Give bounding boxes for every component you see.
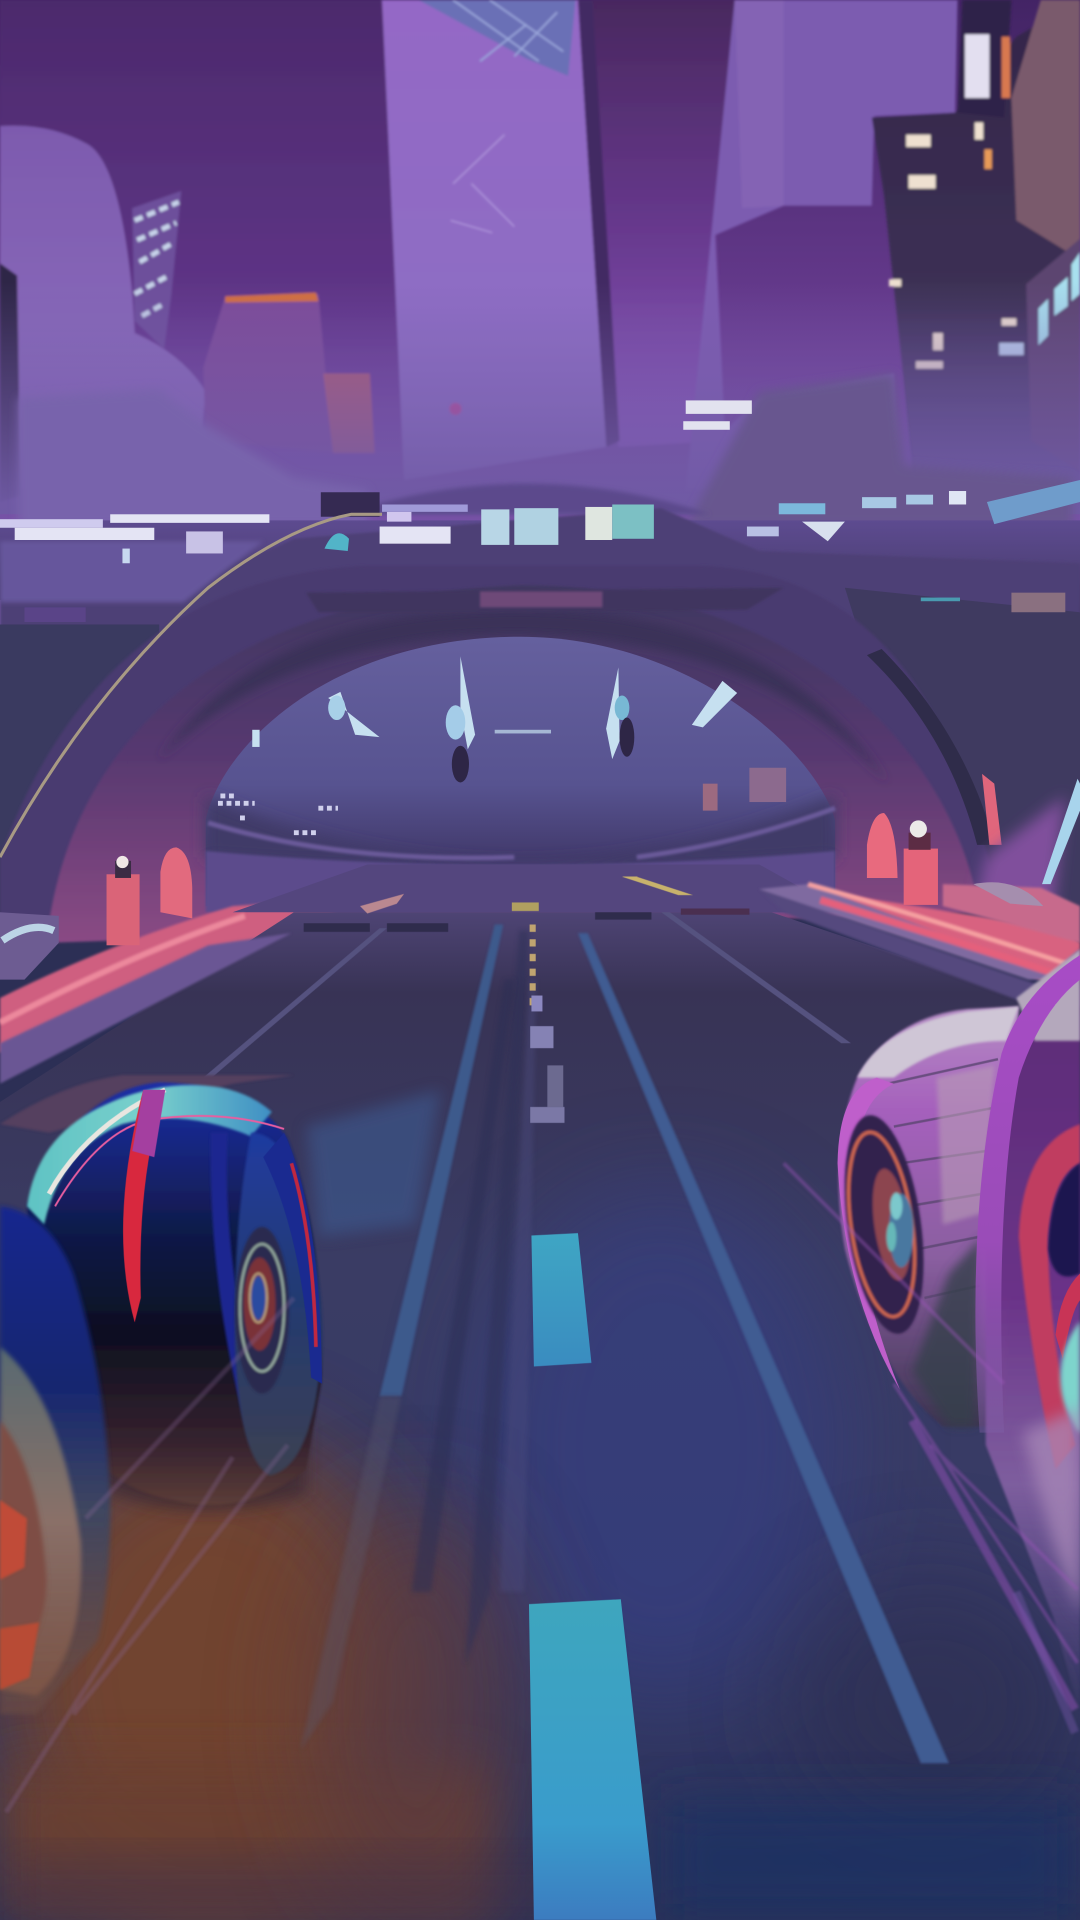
road bridge arch: [0, 514, 1080, 943]
right sidewalk pink: [765, 882, 1080, 980]
left car wheels: [0, 1075, 322, 1812]
building: far right brown slab: [1011, 0, 1080, 260]
left sidewalk pink: [0, 896, 367, 1053]
blue tyre groove: [210, 1133, 272, 1445]
right main lane: [578, 933, 949, 1763]
pale wash over big wheel: [1022, 1408, 1080, 1616]
building: dark right tower: [576, 0, 747, 447]
building: lit facade signage: [132, 191, 181, 349]
middle cyan dash: [531, 1233, 591, 1367]
lantern left tall: [107, 874, 140, 945]
bottom right blue: [661, 1800, 1080, 1920]
road colour washes: [0, 1090, 1080, 1920]
tyre tread ridges: [888, 1059, 998, 1298]
right teal structure panels: [921, 598, 960, 601]
hanging lights: [252, 656, 737, 759]
building: central tower side edge: [578, 0, 620, 447]
cyan sign: [324, 533, 349, 551]
road lane markings: [203, 877, 949, 1920]
road underlay upper segment: [233, 864, 845, 912]
building: tower glass roof: [419, 0, 576, 76]
building: pale right stack: [686, 0, 958, 490]
brown dust centre: [306, 1504, 527, 1920]
neon strips right: [683, 400, 1080, 541]
low haze over the city: [0, 282, 1080, 514]
building: pink beacon: [449, 403, 462, 415]
big tyre tread: [1016, 949, 1080, 1041]
tyre white sheen: [49, 1090, 165, 1194]
right side pink strip: [982, 774, 1002, 845]
building: top right dark block: [958, 0, 1011, 118]
building: lower right tower: [1026, 239, 1080, 471]
treads behind left tyre: [0, 1075, 294, 1133]
left front tyre body: [27, 1082, 321, 1505]
pink panels on bridge: [480, 591, 602, 607]
brown dust bottom-left band: [0, 1763, 490, 1920]
magenta sidewall: [838, 1078, 900, 1390]
main road surface: [0, 912, 1080, 1920]
arch inner ring: [47, 585, 980, 943]
big rim red ring: [1019, 1124, 1080, 1469]
centre tracks: [465, 931, 529, 1665]
rear left tyre body: [0, 1206, 110, 1714]
lantern left cap: [115, 856, 131, 878]
building: main central tower: [382, 0, 606, 480]
low grey-purple buildings: [18, 389, 367, 527]
city skyline buildings: [0, 0, 1080, 502]
building: cyan window strip: [1038, 299, 1048, 345]
dark asphalt right: [784, 1567, 1078, 1837]
lantern right cap: [909, 820, 931, 850]
arch doorway right: [867, 813, 898, 878]
big magenta arc: [975, 955, 1080, 1433]
big rim interior: [1048, 1163, 1080, 1277]
wheel rim: [235, 1227, 289, 1393]
far cross bars: [304, 909, 749, 932]
building: faint window grid: [451, 135, 514, 233]
lantern right tall: [904, 849, 938, 905]
right low wall: [943, 884, 1080, 943]
tunnel wall signs: [749, 768, 786, 802]
building: orange roof highlight: [225, 293, 318, 302]
pink lanterns and pillars: [0, 813, 1080, 1053]
shadow under left tyre: [37, 1371, 306, 1510]
building: pale left block: [0, 126, 294, 490]
main arch outer ring: [0, 566, 998, 943]
tunnel opening: [206, 637, 835, 912]
arch doorway left: [160, 847, 192, 918]
brown dust left: [0, 1430, 416, 1920]
speed lines: [6, 1298, 294, 1812]
tunnel left lights: [218, 796, 338, 833]
building: orange window glow: [323, 373, 375, 453]
building: dark left tower: [0, 0, 404, 490]
wheel rim right: [832, 1110, 936, 1339]
blue sidewall edge: [263, 1133, 322, 1384]
upper bridge panel row: [306, 588, 784, 612]
tunnel back wall curve: [206, 796, 835, 869]
big rim red inner: [1056, 1273, 1080, 1359]
road kerbs: [0, 884, 1080, 1084]
sky backdrop: [0, 0, 1080, 637]
right outer arch rib: [867, 649, 994, 845]
far centre dashes: [530, 924, 535, 1010]
raised bridge block: [0, 508, 1080, 637]
cyan hub glow: [1060, 1321, 1080, 1434]
purple speed streaks: [784, 1163, 1078, 1663]
tyre top highlight: [27, 1085, 272, 1224]
right side wall of the bridge: [845, 588, 1080, 943]
left pink speed streak: [0, 916, 245, 1022]
right car wheels: [784, 949, 1080, 1733]
building: small orange-lit block: [203, 294, 333, 453]
blue patch left: [306, 1090, 441, 1237]
left side pale grey machinery: [0, 912, 59, 980]
lilac deck left of railing: [0, 541, 263, 602]
tyre dark lower panel: [912, 1237, 982, 1427]
blue patch centre: [478, 1188, 845, 1702]
left kerb: [0, 933, 291, 1084]
rear wheel disc: [0, 1420, 47, 1678]
building: lit windows: [889, 37, 1024, 369]
left wheel side wall: [235, 1133, 322, 1476]
left thin lane: [203, 928, 387, 1078]
neon screens centre: [321, 492, 654, 545]
dark hanging figures: [452, 718, 634, 782]
right pink speed streak: [808, 884, 1078, 967]
tyre pale centre patch: [937, 1065, 994, 1224]
near cyan dash: [529, 1599, 656, 1920]
neon strips left: [0, 512, 451, 563]
left side wall of the bridge: [0, 624, 159, 918]
tunnel floor: [206, 851, 835, 912]
right front tyre body: [839, 1007, 1019, 1427]
horizon yellow marks: [622, 877, 693, 895]
big right tyre: [986, 949, 1080, 1714]
red tyre stripe: [123, 1090, 165, 1322]
building: right tower shade panels: [735, 0, 784, 208]
skyway railing: [0, 514, 382, 857]
tunnel lanes: [208, 808, 835, 858]
tyre white top: [857, 1007, 1019, 1078]
left central lane: [380, 924, 503, 1396]
background hills and neon skyway: [0, 373, 1080, 637]
right kerb: [759, 889, 1080, 1007]
tunnel interior: [206, 637, 835, 906]
rear wheel red glow: [0, 1500, 27, 1580]
red fender trim: [291, 1163, 316, 1347]
right wall lilac tint: [973, 796, 1065, 912]
distant dome: [343, 484, 710, 514]
building: edge tower far left: [0, 263, 21, 502]
deck surface: [0, 520, 1080, 612]
building: rear right dark block: [872, 0, 1080, 490]
bottom dark shade: [0, 1861, 588, 1920]
pale grey stones: [973, 882, 1043, 906]
right thin lane: [661, 912, 851, 1043]
rear left hub: [0, 1347, 81, 1696]
arch soffit dark band: [159, 610, 888, 784]
building: white neon panel: [965, 34, 989, 98]
sky blue light rod: [1042, 779, 1080, 884]
